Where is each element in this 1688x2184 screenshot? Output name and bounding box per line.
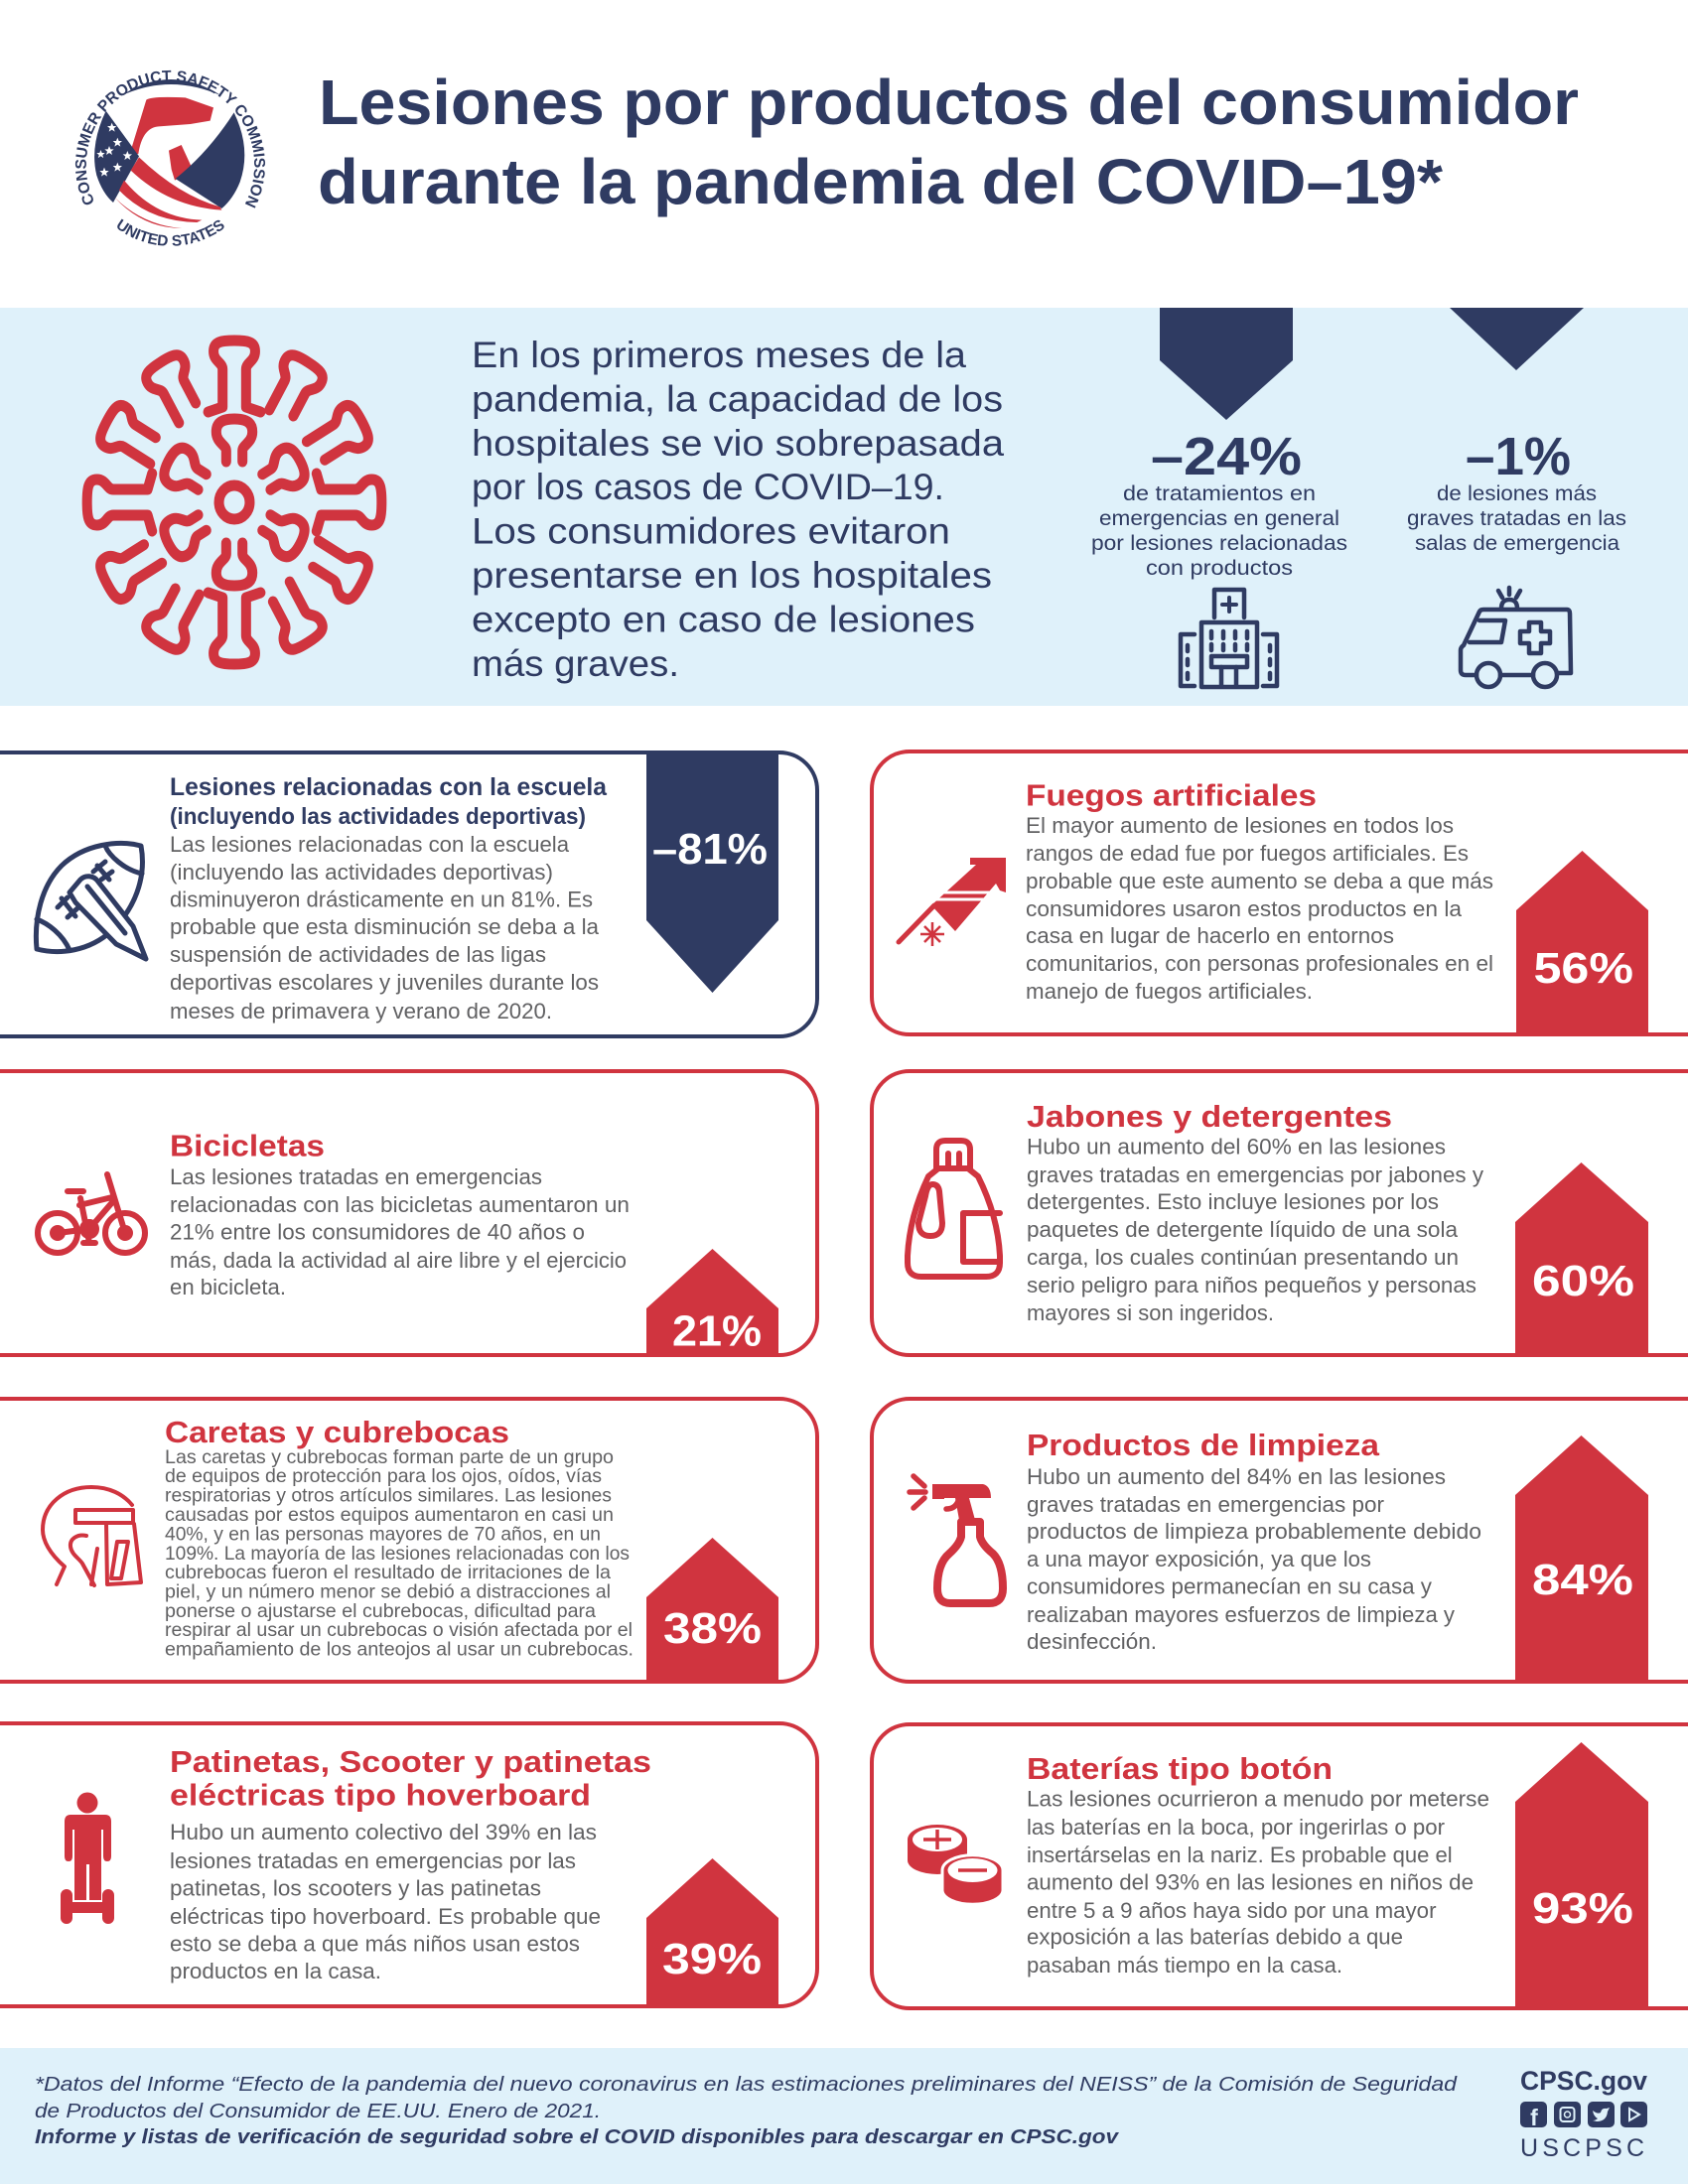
- stat: minus 1 percent: salas de emergencia: [1415, 532, 1619, 555]
- body text: Las lesiones tratadas en emergencias: [170, 1164, 542, 1189]
- body text: 21% entre los consumidores de 40 años o: [170, 1220, 585, 1245]
- body text: disminuyeron drásticamente en un 81%. Es: [170, 887, 593, 911]
- intro text: pandemia, la capacidad de los: [472, 378, 1003, 419]
- title: durante la pandemia del COVID–19*: [318, 146, 1443, 217]
- footnote text: [35, 2074, 1458, 2148]
- body text: mayores si son ingeridos.: [1027, 1300, 1274, 1325]
- heading: eléctricas tipo hoverboard: [170, 1778, 591, 1813]
- heading: Jabones y detergentes: [1027, 1099, 1392, 1134]
- arrow: minus 81 percent: –81%: [652, 825, 768, 874]
- logo: CPSC seal: UNITED STATES: [117, 218, 224, 246]
- arrow: up 84 percent: 84%: [1532, 1556, 1633, 1604]
- arrow: up 84 percent: [1515, 1435, 1648, 1683]
- icon: social media: f: [1530, 2105, 1538, 2130]
- body text: graves tratadas en emergencias por jabones y: [1027, 1162, 1483, 1187]
- arrow: up 60 percent: 60%: [1532, 1257, 1634, 1305]
- body text: ponerse o ajustarse el cubrebocas, dificultad para: [165, 1600, 596, 1622]
- heading: Productos de limpieza: [1027, 1428, 1380, 1462]
- body text: [170, 832, 600, 1024]
- stat: minus 24 percent: [1091, 308, 1347, 687]
- body text: (incluyendo las actividades deportivas): [170, 860, 553, 885]
- stat: minus 1 percent: graves tratadas en las: [1407, 507, 1626, 530]
- body text: [1027, 1786, 1489, 1978]
- heading: [170, 773, 608, 829]
- body text: patinetas, los scooters y las patinetas: [170, 1876, 541, 1901]
- panel: intro band: [0, 308, 1688, 706]
- panel: button batteries: [872, 1724, 1688, 2009]
- body text: aumento del 93% en las lesiones en niños de: [1027, 1870, 1474, 1894]
- body text: exposición a las baterías debido a que: [1027, 1925, 1403, 1950]
- body text: esto se deba a que más niños usan estos: [170, 1932, 580, 1956]
- body text: consumidores usaron estos productos en la: [1026, 896, 1463, 921]
- body text: serio peligro para niños pequeños y personas: [1027, 1273, 1477, 1297]
- stat: minus 24 percent: –24%: [1151, 427, 1302, 486]
- title: Lesiones por productos del consumidor: [319, 67, 1579, 138]
- panel: bicycles: [0, 1071, 817, 1356]
- intro text: En los primeros meses de la: [472, 335, 966, 375]
- panel: soaps and detergents: [872, 1071, 1688, 1356]
- arrow: minus 81 percent: [646, 751, 778, 993]
- body text: suspensión de actividades de las ligas: [170, 942, 546, 967]
- intro text: [472, 335, 1004, 684]
- body text: más, dada la actividad al aire libre y el ejercicio: [170, 1248, 627, 1273]
- body text: [1027, 1464, 1481, 1654]
- intro text: más graves.: [472, 643, 679, 684]
- heading: (incluyendo las actividades deportivas): [170, 803, 586, 829]
- arrow: down 24: [1160, 308, 1293, 420]
- stat: minus 1 percent: –1%: [1466, 427, 1571, 486]
- body text: Las lesiones ocurrieron a menudo por meterse: [1027, 1786, 1489, 1811]
- body text: productos en la casa.: [170, 1959, 381, 1983]
- arrow: up 93 percent: [1515, 1742, 1648, 2009]
- intro text: excepto en caso de lesiones: [472, 599, 975, 639]
- icon: spray bottle: [910, 1476, 1003, 1603]
- arrow: up 21 percent: 21%: [672, 1306, 762, 1356]
- body text: [170, 1164, 630, 1299]
- arrow: up 60 percent: [1515, 1162, 1648, 1356]
- heading: Patinetas, Scooter y patinetas: [170, 1744, 651, 1779]
- panel: footer: [0, 2048, 1688, 2184]
- icon: hospital: [1181, 590, 1277, 687]
- body text: entre 5 a 9 años haya sido por una mayor: [1027, 1898, 1436, 1923]
- body text: consumidores permanecían en su casa y: [1027, 1574, 1432, 1598]
- panel: skateboards and hoverboards: [0, 1723, 817, 2007]
- body text: empañamiento de los anteojos al usar un cubrebocas.: [165, 1639, 633, 1661]
- heading: Fuegos artificiales: [1026, 777, 1317, 812]
- body text: comunitarios, con personas profesionales en el: [1026, 951, 1493, 976]
- body text: productos de limpieza probablemente debido: [1027, 1519, 1481, 1544]
- website and social handles: USCPSC: [1520, 2134, 1644, 2162]
- arrow: up 56 percent: 56%: [1533, 944, 1633, 993]
- body text: 40%, y en las personas mayores de 70 años, en un: [165, 1524, 601, 1546]
- body text: [170, 1820, 601, 1983]
- body text: respiratorias y otros artículos similares. Las lesiones: [165, 1484, 612, 1506]
- body text: piel, y un número menor se debió a distracciones al: [165, 1581, 611, 1603]
- heading: Bicicletas: [170, 1128, 325, 1163]
- heading: Lesiones relacionadas con la escuela: [170, 773, 608, 801]
- website and social handles: [1520, 2066, 1647, 2162]
- body text: El mayor aumento de lesiones en todos los: [1026, 813, 1454, 838]
- body text: Hubo un aumento colectivo del 39% en las: [170, 1820, 597, 1844]
- stat: minus 1 percent: de lesiones más: [1437, 482, 1597, 505]
- body text: rangos de edad fue por fuegos artificiales. Es: [1026, 841, 1469, 866]
- footnote text: *Datos del Informe “Efecto de la pandemia del nuevo coronavirus en las estimaciones preliminares del NEISS” de la Comisión de Seguridad: [35, 2074, 1458, 2096]
- logo: CPSC seal: CONSUMER PRODUCT SAFETY COMMISSION: [75, 69, 266, 208]
- icon: football and pencil: [36, 843, 146, 959]
- body text: 109%. La mayoría de las lesiones relacionadas con los: [165, 1543, 630, 1565]
- title: [318, 67, 1579, 217]
- heading: Caretas y cubrebocas: [165, 1415, 509, 1449]
- stat: minus 24 percent: de tratamientos en: [1123, 482, 1316, 505]
- panel: cleaning products: [872, 1399, 1688, 1683]
- icon: firework rocket: [899, 858, 1006, 946]
- arrow: up 56 percent: [1516, 851, 1648, 1035]
- icon: face shield: [43, 1487, 141, 1585]
- panel: school injuries: [0, 751, 817, 1036]
- panel: fireworks: [872, 751, 1688, 1035]
- stat: minus 24 percent: emergencias en general: [1099, 507, 1339, 530]
- arrow: down 1: [1450, 308, 1584, 370]
- icon: bicycle: [38, 1174, 145, 1253]
- body text: causadas por estos equipos aumentaron en casi un: [165, 1504, 614, 1526]
- body text: las baterías en la boca, por ingerirlas o por: [1027, 1815, 1445, 1840]
- body text: deportivas escolares y juveniles durante los: [170, 970, 599, 995]
- intro text: hospitales se vio sobrepasada: [472, 423, 1004, 464]
- arrow: up 39 percent: [646, 1858, 778, 2007]
- body text: realizaban mayores esfuerzos de limpieza y: [1027, 1602, 1455, 1627]
- intro text: por los casos de COVID–19.: [472, 467, 944, 507]
- body text: pasaban más tiempo en la casa.: [1027, 1953, 1342, 1978]
- body text: desinfección.: [1027, 1629, 1157, 1654]
- body text: respirar al usar un cubrebocas o visión afectada por el: [165, 1619, 633, 1641]
- icon: detergent bottle: [908, 1141, 1000, 1277]
- body text: [165, 1446, 633, 1661]
- arrow: up 21 percent: [646, 1249, 778, 1356]
- body text: de equipos de protección para los ojos, oídos, vías: [165, 1465, 602, 1487]
- body text: detergentes. Esto incluye lesiones por los: [1027, 1189, 1439, 1214]
- body text: paquetes de detergente líquido de una sola: [1027, 1217, 1459, 1242]
- arrow: up 93 percent: 93%: [1532, 1884, 1633, 1933]
- body text: casa en lugar de hacerlo en entornos: [1026, 923, 1394, 948]
- body text: carga, los cuales continúan presentando un: [1027, 1245, 1459, 1270]
- heading: [170, 1744, 651, 1813]
- body text: Las lesiones relacionadas con la escuela: [170, 832, 570, 857]
- stat: minus 1 percent: [1407, 308, 1626, 687]
- body text: insertárselas en la nariz. Es probable que el: [1027, 1843, 1453, 1867]
- icon: person on hoverboard: [61, 1793, 114, 1924]
- arrow: up 38 percent: [646, 1538, 778, 1684]
- body text: lesiones tratadas en emergencias por las: [170, 1848, 576, 1873]
- body text: eléctricas tipo hoverboard. Es probable que: [170, 1904, 601, 1929]
- body text: relacionadas con las bicicletas aumentaron un: [170, 1192, 630, 1217]
- arrow: up 38 percent: 38%: [663, 1604, 762, 1653]
- body text: probable que este aumento se deba a que más: [1026, 869, 1493, 893]
- body text: Hubo un aumento del 84% en las lesiones: [1027, 1464, 1446, 1489]
- body text: Las caretas y cubrebocas forman parte de un grupo: [165, 1446, 614, 1468]
- intro text: presentarse en los hospitales: [472, 555, 992, 596]
- body text: manejo de fuegos artificiales.: [1026, 979, 1313, 1004]
- website and social handles: CPSC.gov: [1520, 2066, 1647, 2096]
- arrow: up 39 percent: 39%: [662, 1935, 762, 1983]
- body text: probable que esta disminución se deba a la: [170, 914, 600, 939]
- icon: button batteries: [908, 1825, 1003, 1904]
- icon: ambulance: [1461, 588, 1571, 687]
- body text: [1027, 1134, 1483, 1325]
- body text: cubrebocas fueron el resultado de irritaciones de la: [165, 1562, 611, 1583]
- body text: meses de primavera y verano de 2020.: [170, 999, 552, 1024]
- body text: Hubo un aumento del 60% en las lesiones: [1027, 1134, 1446, 1160]
- footnote text: Informe y listas de verificación de seguridad sobre el COVID disponibles para descargar en CPSC.gov: [35, 2126, 1120, 2148]
- body text: [1026, 813, 1493, 1004]
- intro text: Los consumidores evitaron: [472, 511, 950, 552]
- footnote text: de Productos del Consumidor de EE.UU. Enero de 2021.: [35, 2101, 601, 2122]
- stat: minus 24 percent: por lesiones relacionadas: [1091, 532, 1347, 555]
- body text: a una mayor exposición, ya que los: [1027, 1547, 1371, 1571]
- panel: face shields and masks: [0, 1399, 817, 1684]
- icon: coronavirus: [87, 341, 381, 664]
- body text: graves tratadas en emergencias por: [1027, 1492, 1384, 1517]
- heading: Baterías tipo botón: [1027, 1751, 1333, 1786]
- stat: minus 24 percent: con productos: [1146, 557, 1293, 580]
- body text: en bicicleta.: [170, 1275, 286, 1299]
